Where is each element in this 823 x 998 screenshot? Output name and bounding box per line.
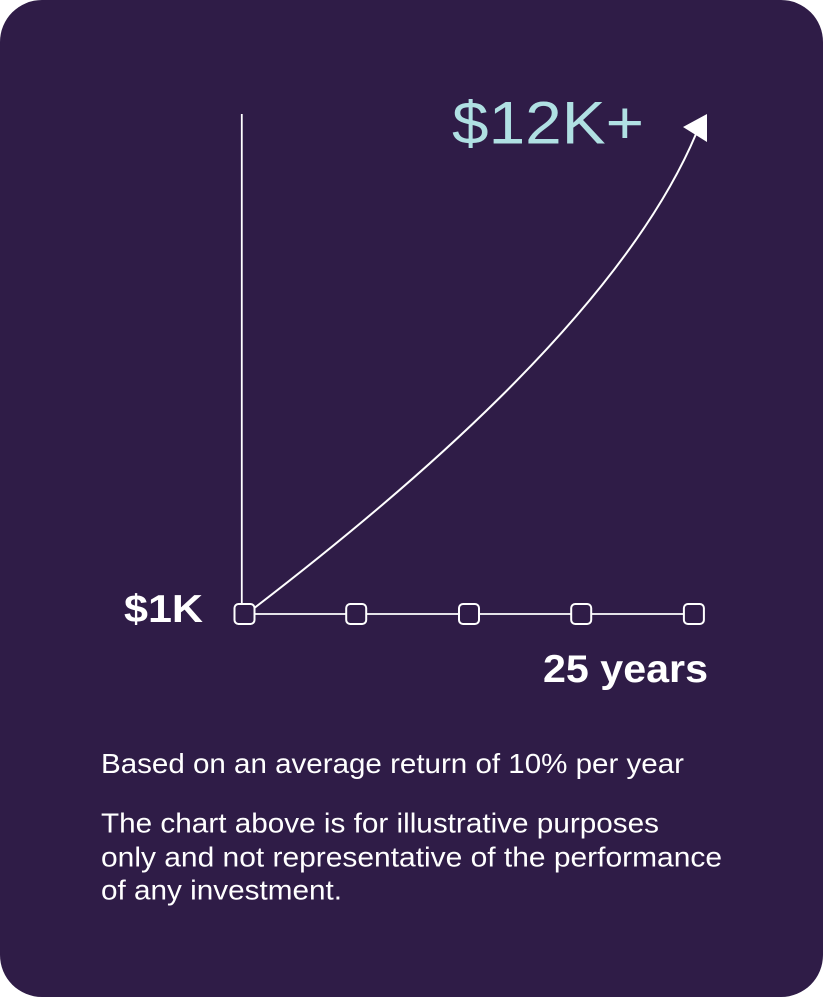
growth curve bbox=[253, 134, 696, 609]
label: time span: 25 years bbox=[543, 648, 708, 691]
text block: disclaimer: The chart above is for illustrative purposes bbox=[101, 808, 659, 838]
vertical axis bbox=[241, 114, 243, 604]
chart: growth over 25 years bbox=[124, 90, 708, 691]
text block: disclaimer: only and not representative of the performance bbox=[101, 842, 722, 872]
arrowhead bbox=[683, 114, 707, 142]
text block: disclaimer bbox=[101, 808, 722, 906]
label: final value: $12K+ bbox=[452, 90, 644, 156]
axis markers bbox=[234, 604, 704, 624]
horizontal axis bbox=[254, 613, 684, 615]
label: starting value: $1K bbox=[124, 588, 203, 631]
text block: return assumption: Based on an average return of 10% per year bbox=[101, 748, 684, 779]
text block: disclaimer: of any investment. bbox=[101, 874, 342, 906]
